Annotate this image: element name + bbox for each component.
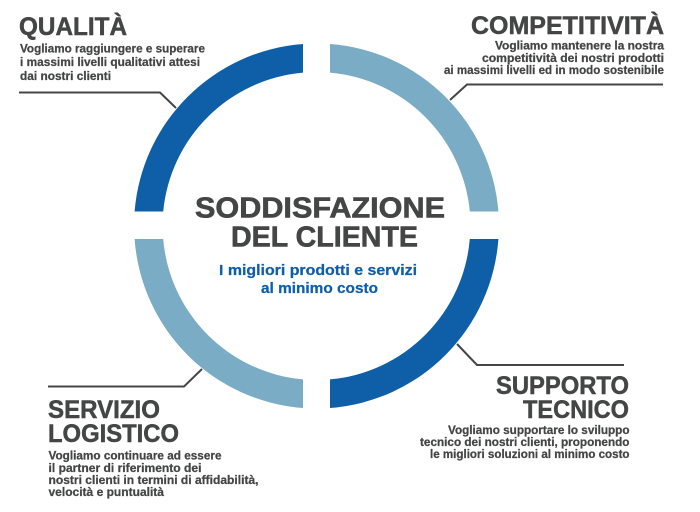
heading: servizio logistico: [48, 396, 179, 448]
text: supporto tecnico: le migliori soluzioni al minimo costo: [430, 449, 630, 461]
text: servizio logistico: velocità e puntualità: [48, 487, 165, 499]
text: servizio logistico: [48, 450, 258, 499]
central title: DEL CLIENTE: [231, 222, 418, 254]
heading: supporto tecnico: [496, 372, 629, 424]
text: supporto tecnico: [420, 425, 630, 461]
text: supporto tecnico: Vogliamo supportare lo sviluppo: [448, 425, 630, 437]
text: competitività: Vogliamo mantenere la nostra: [495, 40, 665, 52]
text: servizio logistico: il partner di riferimento dei: [48, 463, 202, 475]
text: qualità: i massimi livelli qualitativi attesi: [20, 57, 200, 69]
heading: supporto tecnico: SUPPORTO: [496, 372, 629, 400]
heading: servizio logistico: LOGISTICO: [48, 420, 179, 448]
text: qualità: Vogliamo raggiungere e superare: [20, 44, 205, 56]
text: qualità: [20, 44, 205, 83]
text: competitività: [444, 40, 665, 77]
ring segment: supporto tecnico: [330, 239, 498, 408]
connector: supporto tecnico: [457, 344, 624, 365]
ring segment: servizio logistico: [135, 239, 303, 408]
text: qualità: dai nostri clienti: [20, 71, 111, 83]
text: competitività: ai massimi livelli ed in modo sostenibile: [444, 65, 664, 77]
heading: qualità: QUALITÀ: [19, 12, 127, 41]
central subtitle: I migliori prodotti e servizi: [219, 262, 417, 279]
heading: competitività: COMPETITIVITÀ: [471, 11, 664, 40]
connector: servizio logistico: [48, 369, 202, 386]
central title: [195, 192, 445, 254]
text: servizio logistico: Vogliamo continuare ad essere: [48, 450, 222, 462]
connector: qualità: [19, 92, 176, 108]
heading: servizio logistico: SERVIZIO: [48, 396, 160, 424]
text: supporto tecnico: tecnico dei nostri clienti, proponendo: [420, 437, 630, 449]
connector: competitività: [450, 84, 663, 100]
central title: SODDISFAZIONE: [195, 192, 445, 224]
central subtitle: [219, 262, 417, 297]
heading: supporto tecnico: TECNICO: [523, 396, 629, 424]
ring segment: qualità: [135, 44, 303, 212]
central subtitle: al minimo costo: [261, 280, 378, 297]
text: competitività: competitività dei nostri prodotti: [482, 53, 664, 65]
ring segment: competitività: [330, 44, 498, 212]
text: servizio logistico: nostri clienti in termini di affidabilità,: [48, 475, 258, 487]
